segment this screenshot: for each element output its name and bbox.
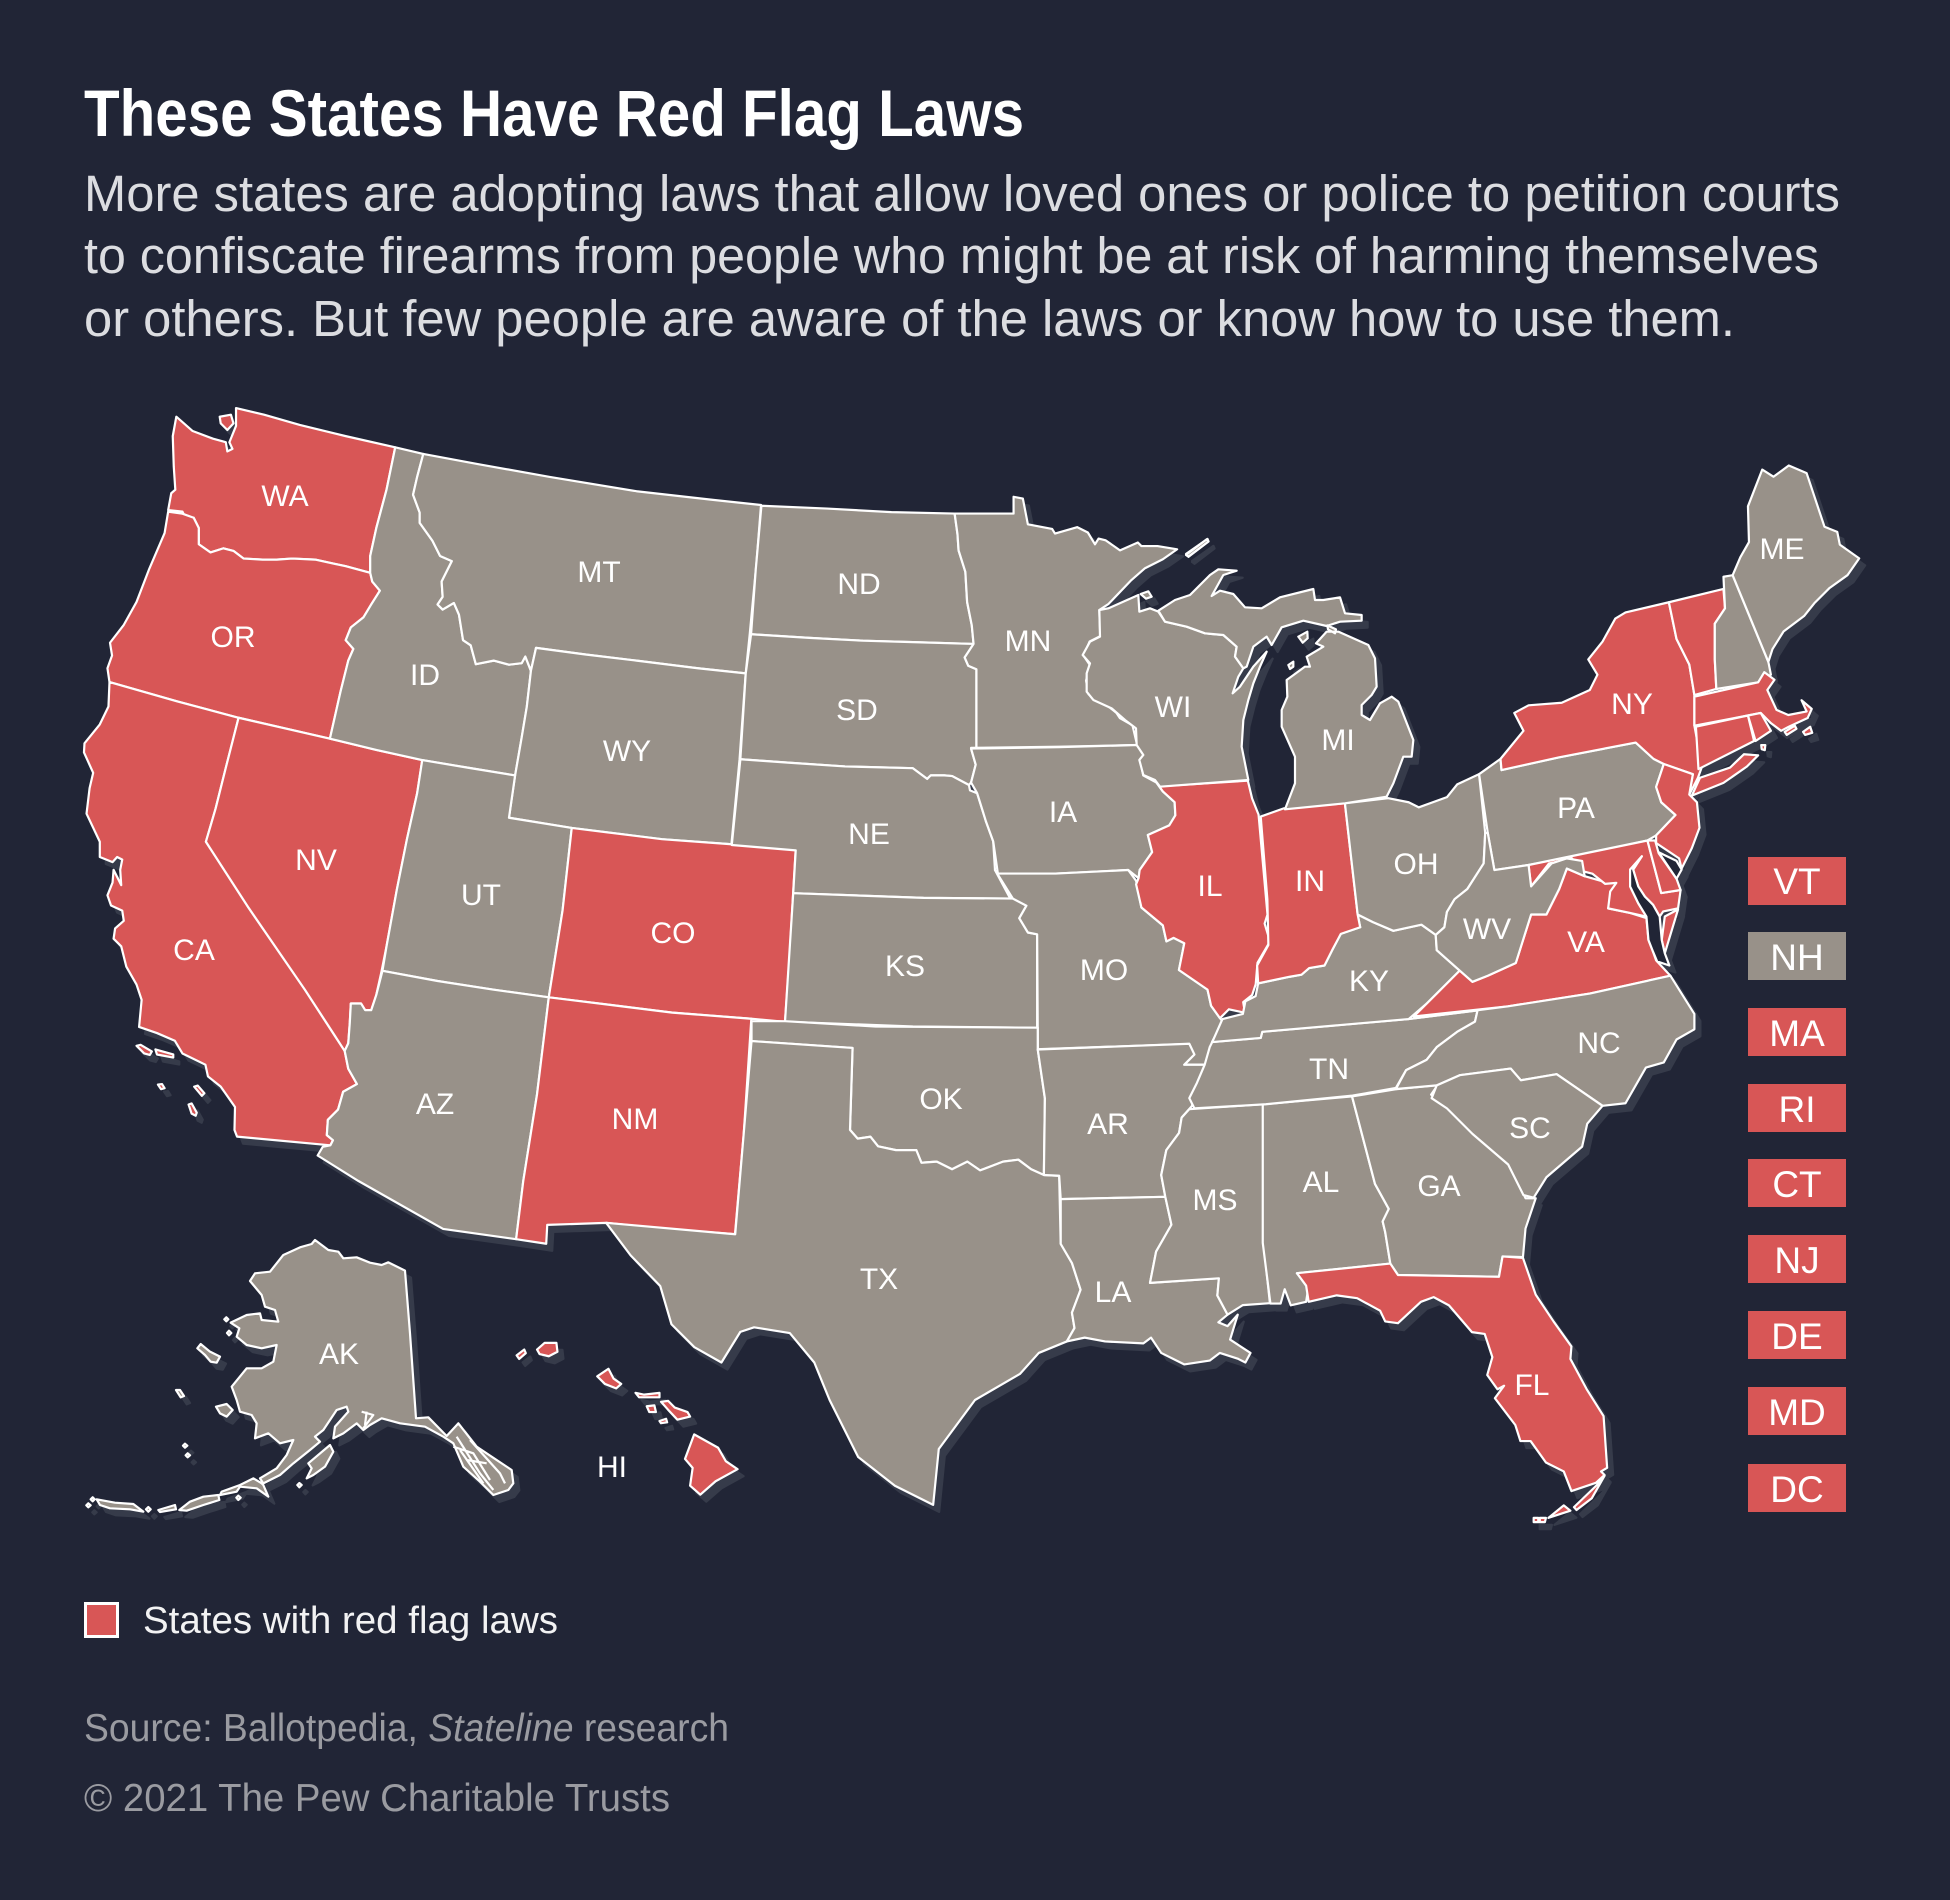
- state: Missouri: MO: [1080, 954, 1128, 987]
- state: Utah: UT: [461, 879, 501, 912]
- state: Oklahoma: [752, 1021, 1045, 1175]
- state: South Dakota: [740, 634, 976, 785]
- state: Delaware: [1647, 841, 1681, 893]
- state: Wisconsin: [1083, 591, 1267, 787]
- state: Maine: [1733, 466, 1859, 662]
- state: Nebraska: NE: [848, 818, 890, 851]
- state: Indiana: [1257, 803, 1360, 983]
- water: Chesapeake and Delaware bays: [1630, 852, 1682, 966]
- tag: DE: DE: [1771, 1316, 1823, 1357]
- state: Kansas: [785, 893, 1037, 1028]
- subtitle text block: or others. But few people are aware of the laws or know how to use them.: [84, 290, 1735, 347]
- map of the United States: [84, 408, 1859, 1522]
- state: Alabama: [1263, 1096, 1390, 1305]
- state: Montana: [413, 454, 761, 673]
- tag: CT: CT: [1772, 1164, 1822, 1205]
- label: Hawaii: HI: [597, 1451, 627, 1484]
- state: Connecticut: [1696, 716, 1754, 769]
- state: New York: NY: [1611, 688, 1653, 721]
- tag: MD: [1748, 1387, 1846, 1435]
- state: Maine: ME: [1760, 533, 1804, 566]
- state: North Carolina: NC: [1577, 1027, 1621, 1060]
- source note: Source: Ballotpedia, Stateline research: [84, 1707, 729, 1750]
- state: Rhode Island: [1748, 713, 1771, 741]
- state: West Virginia: [1436, 833, 1585, 982]
- title: These States Have Red Flag Laws: [84, 76, 1024, 150]
- state: Virginia: [1414, 869, 1678, 1017]
- tag: DE: [1748, 1311, 1846, 1359]
- state: Hawaii islands: [517, 1343, 738, 1495]
- state: Utah: [382, 760, 572, 997]
- tag: MD: MD: [1768, 1392, 1826, 1433]
- state: Montana: MT: [577, 556, 621, 589]
- state: Alaska: AK: [319, 1338, 359, 1371]
- state: Texas: [606, 1041, 1081, 1505]
- subtitle text block: to confiscate firearms from people who might be at risk of harming themselves: [84, 227, 1819, 284]
- tag: VT: [1748, 857, 1846, 905]
- state list: small northeastern states: [1748, 857, 1846, 1512]
- state: Arizona: [318, 971, 549, 1239]
- state: Minnesota: MN: [1005, 625, 1051, 658]
- state: North Carolina: [1396, 976, 1694, 1106]
- state: Wyoming: [509, 648, 746, 844]
- state: Florida: FL: [1514, 1369, 1550, 1402]
- subtitle text block: More states are adopting laws that allow loved ones or police to petition courts: [84, 165, 1840, 222]
- state: Iowa: IA: [1049, 796, 1077, 829]
- state: New Jersey: [1656, 764, 1699, 869]
- state: Georgia: GA: [1417, 1170, 1461, 1203]
- state: North Dakota: ND: [837, 568, 881, 601]
- tag: MA: [1748, 1008, 1846, 1056]
- state: Idaho: ID: [410, 659, 440, 692]
- legend label: States with red flag laws: [143, 1600, 558, 1642]
- state: South Carolina: SC: [1509, 1112, 1551, 1145]
- tag: RI: [1748, 1084, 1846, 1132]
- state: Vermont: [1669, 589, 1725, 695]
- subtitle text block: [84, 165, 1840, 347]
- state: Tennessee: TN: [1309, 1053, 1349, 1086]
- tag: NJ: NJ: [1774, 1240, 1820, 1281]
- tag: DC: [1748, 1464, 1846, 1512]
- state: Tennessee: [1189, 1010, 1478, 1108]
- state: Nebraska: [732, 759, 1013, 899]
- state: Oregon: [107, 512, 380, 739]
- state: Oregon: OR: [210, 621, 256, 654]
- state: California: [84, 682, 357, 1145]
- state: Michigan: [1158, 539, 1413, 809]
- state: Arizona: AZ: [416, 1088, 454, 1121]
- state: Virginia: VA: [1567, 926, 1605, 959]
- state: Alaska: [86, 1240, 513, 1512]
- state: Mississippi: MS: [1192, 1184, 1238, 1217]
- legend: [86, 1600, 558, 1642]
- state: Oklahoma: OK: [919, 1083, 963, 1116]
- state: Kentucky: [1212, 914, 1460, 1042]
- state: Illinois: IL: [1197, 870, 1223, 903]
- state: Arkansas: AR: [1087, 1108, 1129, 1141]
- tag: VT: VT: [1773, 861, 1821, 902]
- state: Pennsylvania: [1479, 743, 1676, 870]
- copyright: © 2021 The Pew Charitable Trusts: [84, 1777, 670, 1820]
- state: Iowa: [971, 745, 1175, 878]
- tag: RI: RI: [1778, 1089, 1816, 1130]
- state: New Hampshire: [1715, 575, 1771, 689]
- state: Alabama: AL: [1303, 1166, 1339, 1199]
- state: Louisiana: LA: [1095, 1276, 1131, 1309]
- state: Idaho: [330, 447, 531, 775]
- state: Kentucky: KY: [1349, 965, 1389, 998]
- state: North Dakota: [751, 506, 974, 644]
- tag: DC: DC: [1770, 1469, 1824, 1510]
- state: Arkansas: [1038, 1044, 1207, 1199]
- state: California: CA: [173, 934, 215, 967]
- state: Wisconsin: WI: [1155, 691, 1191, 724]
- tag: CT: [1748, 1159, 1846, 1207]
- state: Indiana: IN: [1295, 865, 1325, 898]
- state: South Carolina: [1432, 1069, 1603, 1198]
- state: Michigan: MI: [1321, 724, 1355, 757]
- state: Georgia: [1352, 1085, 1536, 1277]
- state: South Dakota: SD: [836, 694, 878, 727]
- state: New Mexico: NM: [612, 1103, 658, 1136]
- state: Wyoming: WY: [603, 735, 651, 768]
- state: Colorado: [549, 828, 796, 1022]
- state: Nevada: NV: [295, 844, 337, 877]
- state: Massachusetts: [1694, 672, 1812, 750]
- state: Missouri: [995, 870, 1223, 1065]
- state: Illinois: [1136, 781, 1270, 1018]
- state: Washington: WA: [261, 480, 309, 513]
- state: Mississippi: [1150, 1104, 1270, 1315]
- state: New Mexico: [516, 997, 751, 1244]
- state: West Virginia: WV: [1463, 913, 1511, 946]
- state: Florida: [1297, 1256, 1607, 1522]
- state: New York: [1501, 602, 1758, 796]
- legend swatch: [86, 1604, 118, 1636]
- state: Ohio: OH: [1394, 848, 1438, 881]
- state: Minnesota: [955, 497, 1209, 748]
- tag: MA: MA: [1769, 1013, 1825, 1054]
- state: Washington: [168, 408, 395, 573]
- tag: NH: NH: [1770, 937, 1824, 978]
- state: Pennsylvania: PA: [1557, 792, 1595, 825]
- state: Louisiana: [1061, 1197, 1251, 1364]
- state: Colorado: CO: [650, 917, 696, 950]
- tag: NJ: [1748, 1235, 1846, 1283]
- state: Kansas: KS: [885, 950, 925, 983]
- tag: NH: [1748, 932, 1846, 980]
- state: Maryland: [1529, 841, 1681, 917]
- state: Texas: TX: [860, 1263, 898, 1296]
- state: Nevada: [206, 718, 422, 1051]
- state: Ohio: [1345, 774, 1485, 935]
